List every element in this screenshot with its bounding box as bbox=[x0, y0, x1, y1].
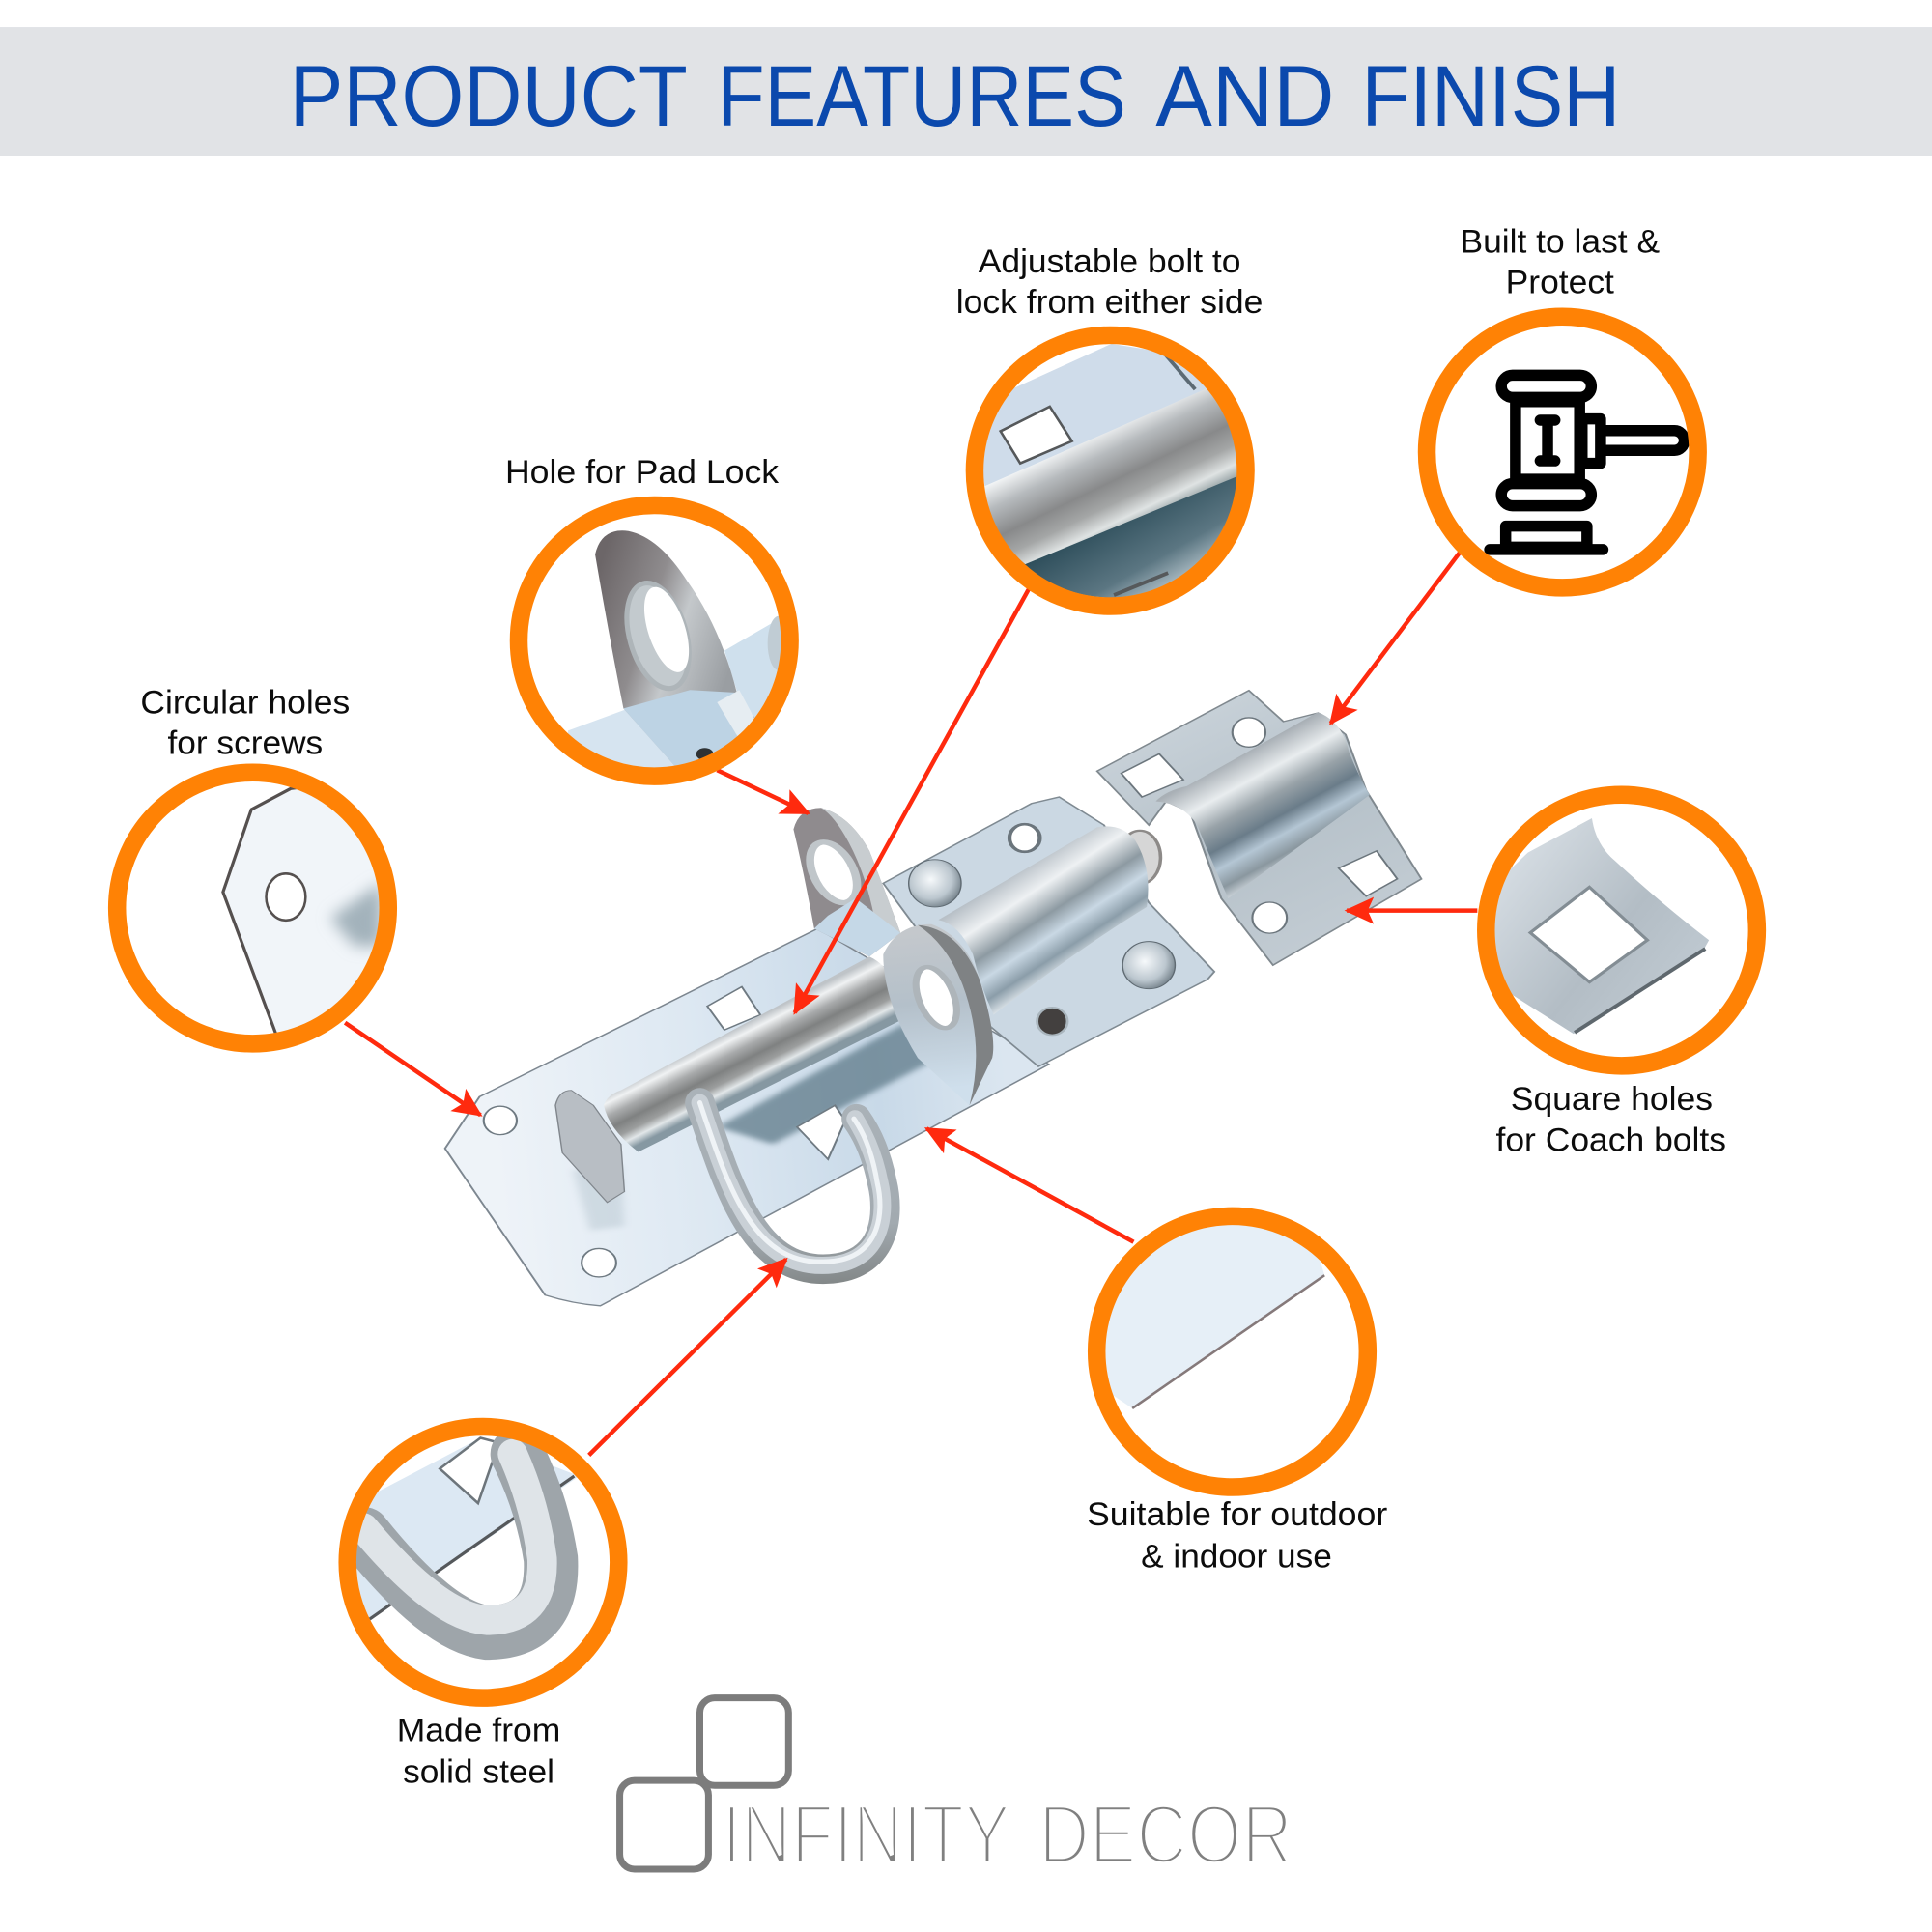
rivet top bbox=[909, 860, 961, 907]
label: outdoor and indoor use: Suitable for outdoor bbox=[1087, 1496, 1387, 1533]
ring bbox=[519, 505, 790, 777]
label: square holes: for Coach bolts bbox=[1495, 1122, 1726, 1158]
flange hole bbox=[908, 965, 964, 1031]
rivet bottom bbox=[1122, 942, 1175, 989]
label: square holes: Square holes bbox=[1511, 1081, 1713, 1118]
plate lower shading bbox=[573, 1166, 624, 1231]
label: outdoor and indoor use bbox=[1087, 1496, 1387, 1575]
plate square hole lower bbox=[797, 1105, 845, 1159]
label: solid steel: Made from bbox=[397, 1712, 560, 1748]
title: FINISH bbox=[1361, 47, 1620, 144]
logo squares bbox=[620, 1698, 788, 1869]
label: adjustable bolt: Adjustable bolt to bbox=[979, 243, 1240, 280]
callout: pad lock hole bbox=[519, 505, 790, 788]
logo: Infinity Decor bbox=[620, 1698, 1293, 1882]
logo wordmark bbox=[722, 1788, 1293, 1882]
ring bbox=[117, 773, 388, 1043]
label: built to last: Protect bbox=[1506, 265, 1614, 301]
label: circular holes bbox=[140, 685, 350, 762]
callout: adjustable bolt bbox=[974, 335, 1246, 616]
label: built to last bbox=[1460, 223, 1660, 301]
label: built to last: Built to last & bbox=[1460, 223, 1660, 260]
label: square holes bbox=[1495, 1081, 1726, 1158]
ring bbox=[1486, 795, 1757, 1065]
title: FEATURES bbox=[717, 47, 1126, 144]
label: solid steel bbox=[397, 1712, 560, 1791]
arrow: adjustable bolt bbox=[795, 589, 1029, 1012]
plate screw hole left top bbox=[484, 1106, 517, 1135]
barrel bbox=[938, 826, 1149, 1015]
back plate bbox=[445, 928, 1049, 1306]
arrow: built to last bbox=[1331, 552, 1460, 724]
zoom photo: square hole bbox=[1479, 818, 1709, 1034]
padlock tab foot bbox=[814, 898, 900, 956]
ring bbox=[1427, 317, 1698, 587]
callout: circular holes bbox=[117, 773, 394, 1043]
T stop bbox=[555, 1091, 624, 1203]
product photo: padbolt latch bbox=[445, 691, 1421, 1306]
zoom photo: plate edge bbox=[1105, 1225, 1325, 1409]
arrow: pad lock hole bbox=[717, 770, 809, 813]
callout: outdoor and indoor use bbox=[1091, 1213, 1368, 1488]
padlock tab rim bbox=[821, 808, 900, 937]
hook highlight bbox=[699, 1103, 880, 1262]
zoom photo: screw hole bbox=[221, 787, 379, 1034]
hook handle bbox=[699, 1103, 885, 1269]
label: adjustable bolt bbox=[956, 243, 1263, 321]
bracket hole top bbox=[1009, 824, 1039, 852]
plate screw hole left bottom bbox=[582, 1248, 616, 1277]
keeper square hole top bbox=[1122, 753, 1183, 797]
bolt shaft bbox=[604, 956, 907, 1151]
label: circular holes: for screws bbox=[167, 725, 323, 762]
logo wordmark: INFINITY bbox=[722, 1788, 1010, 1882]
zoom photo: hook bbox=[352, 1438, 579, 1633]
latch body traced shapes bbox=[445, 691, 1421, 1306]
title bbox=[290, 47, 1620, 144]
keeper round hole bottom bbox=[1252, 902, 1287, 933]
callout: solid steel bbox=[348, 1427, 618, 1698]
label: solid steel: solid steel bbox=[403, 1754, 554, 1791]
logo wordmark: DECOR bbox=[1038, 1788, 1293, 1882]
label: outdoor and indoor use: & indoor use bbox=[1141, 1538, 1332, 1575]
shadow under bolt bbox=[718, 1023, 938, 1144]
padlock tab hole bbox=[802, 839, 866, 906]
keeper round hole top bbox=[1233, 718, 1265, 747]
title: AND bbox=[1155, 47, 1334, 144]
keeper saddle bbox=[1155, 712, 1370, 898]
label: circular holes: Circular holes bbox=[140, 685, 350, 722]
plate square hole upper bbox=[707, 986, 760, 1030]
bracket hole bottom bbox=[1037, 1008, 1067, 1035]
keeper back flange bbox=[1097, 691, 1421, 965]
arrow: circular holes bbox=[345, 1023, 480, 1115]
callout: built to last bbox=[1427, 317, 1698, 587]
barrel end knob bbox=[1120, 831, 1160, 884]
label: pad lock hole: Hole for Pad Lock bbox=[505, 454, 780, 491]
arrow: square holes bbox=[1347, 909, 1477, 912]
arrow: outdoor and indoor use bbox=[926, 1128, 1133, 1242]
callout: square holes bbox=[1479, 795, 1757, 1065]
round flange bbox=[883, 924, 993, 1105]
zoom photo: pad lock tab bbox=[568, 530, 781, 767]
hook body bbox=[699, 1103, 882, 1265]
flange rim bbox=[918, 925, 993, 1105]
icon: gavel bbox=[1490, 375, 1685, 550]
arrow: solid steel bbox=[589, 1260, 786, 1455]
title: PRODUCT bbox=[290, 47, 688, 144]
keeper square hole bottom bbox=[1339, 851, 1397, 896]
title band bbox=[0, 27, 1932, 156]
ring bbox=[975, 335, 1246, 607]
ring bbox=[348, 1427, 618, 1698]
label: adjustable bolt: lock from either side bbox=[956, 284, 1263, 321]
zoom photo: bolt bbox=[983, 344, 1236, 597]
ring bbox=[1096, 1216, 1368, 1488]
guide bracket bbox=[883, 797, 1214, 1066]
padlock tab bbox=[793, 808, 900, 956]
